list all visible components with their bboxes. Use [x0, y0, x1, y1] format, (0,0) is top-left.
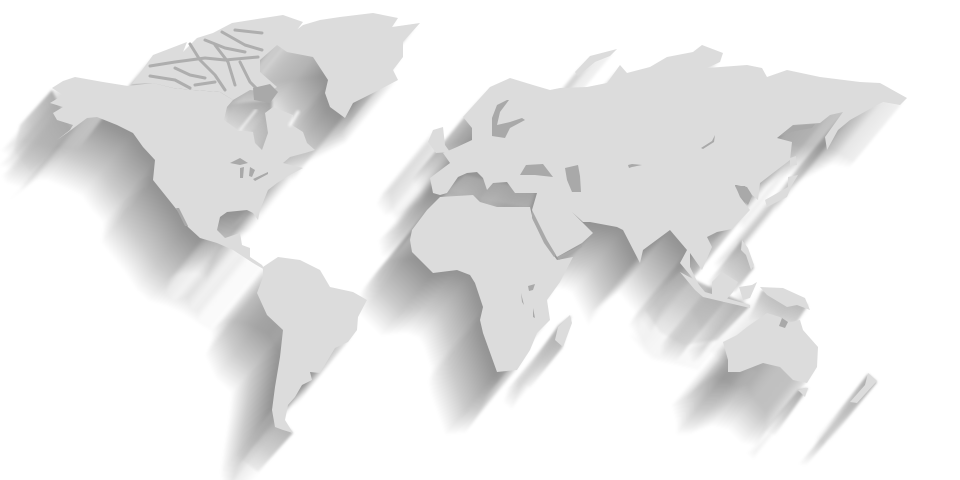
Indonesia shade	[645, 273, 750, 345]
Caspian Sea	[565, 165, 581, 192]
Labrador streak	[290, 112, 298, 125]
Sea of Okhotsk edge	[780, 124, 815, 136]
Mediterranean shade	[448, 175, 535, 208]
Novaya Zemlya	[575, 49, 617, 76]
Madagascar shade	[520, 316, 571, 388]
Foxe Basin	[253, 84, 278, 103]
Africa	[410, 195, 573, 372]
light streaks	[240, 110, 298, 130]
Gulf of California	[176, 208, 188, 226]
Philippines	[741, 240, 754, 270]
Borneo	[712, 272, 738, 302]
Lake Balkhash	[628, 164, 642, 168]
United Kingdom and Ireland	[428, 127, 450, 153]
Alaska shade	[14, 90, 72, 172]
Eurasia	[430, 45, 907, 287]
Arctic archipelago	[132, 15, 303, 100]
Greenland	[277, 13, 420, 118]
Lake Victoria	[528, 284, 535, 291]
New Guinea gap shade	[748, 290, 808, 325]
Great Lakes	[230, 158, 268, 181]
Tasmania shade	[764, 388, 808, 435]
Philippines shade	[708, 240, 754, 292]
Baltic Sea	[492, 100, 525, 138]
Red Sea	[532, 210, 556, 257]
Gulf of Aden	[557, 245, 582, 260]
Yellow Sea	[735, 186, 752, 205]
South America	[257, 257, 367, 433]
Tasmania	[798, 388, 808, 397]
Australia	[723, 313, 818, 383]
New Zealand shade	[818, 374, 877, 440]
New Zealand	[850, 373, 877, 403]
inland water and channels	[150, 30, 815, 328]
Sumatra and Java	[680, 272, 750, 308]
Hudson Bay shade	[224, 100, 272, 150]
Carpentaria	[779, 318, 788, 328]
Lake Tanganyika and Malawi	[521, 293, 535, 318]
North America	[50, 77, 315, 270]
land masses	[50, 13, 907, 433]
Sulawesi	[739, 282, 757, 300]
Black Sea	[520, 164, 553, 177]
Madagascar	[555, 315, 572, 347]
extra shadow fills	[14, 90, 877, 472]
Hudson streak	[240, 110, 256, 130]
Cape Horn shade	[236, 410, 293, 472]
Japan	[765, 156, 798, 207]
Lake Baikal	[701, 135, 715, 149]
New Guinea	[760, 287, 810, 310]
Arctic channels	[150, 30, 262, 90]
